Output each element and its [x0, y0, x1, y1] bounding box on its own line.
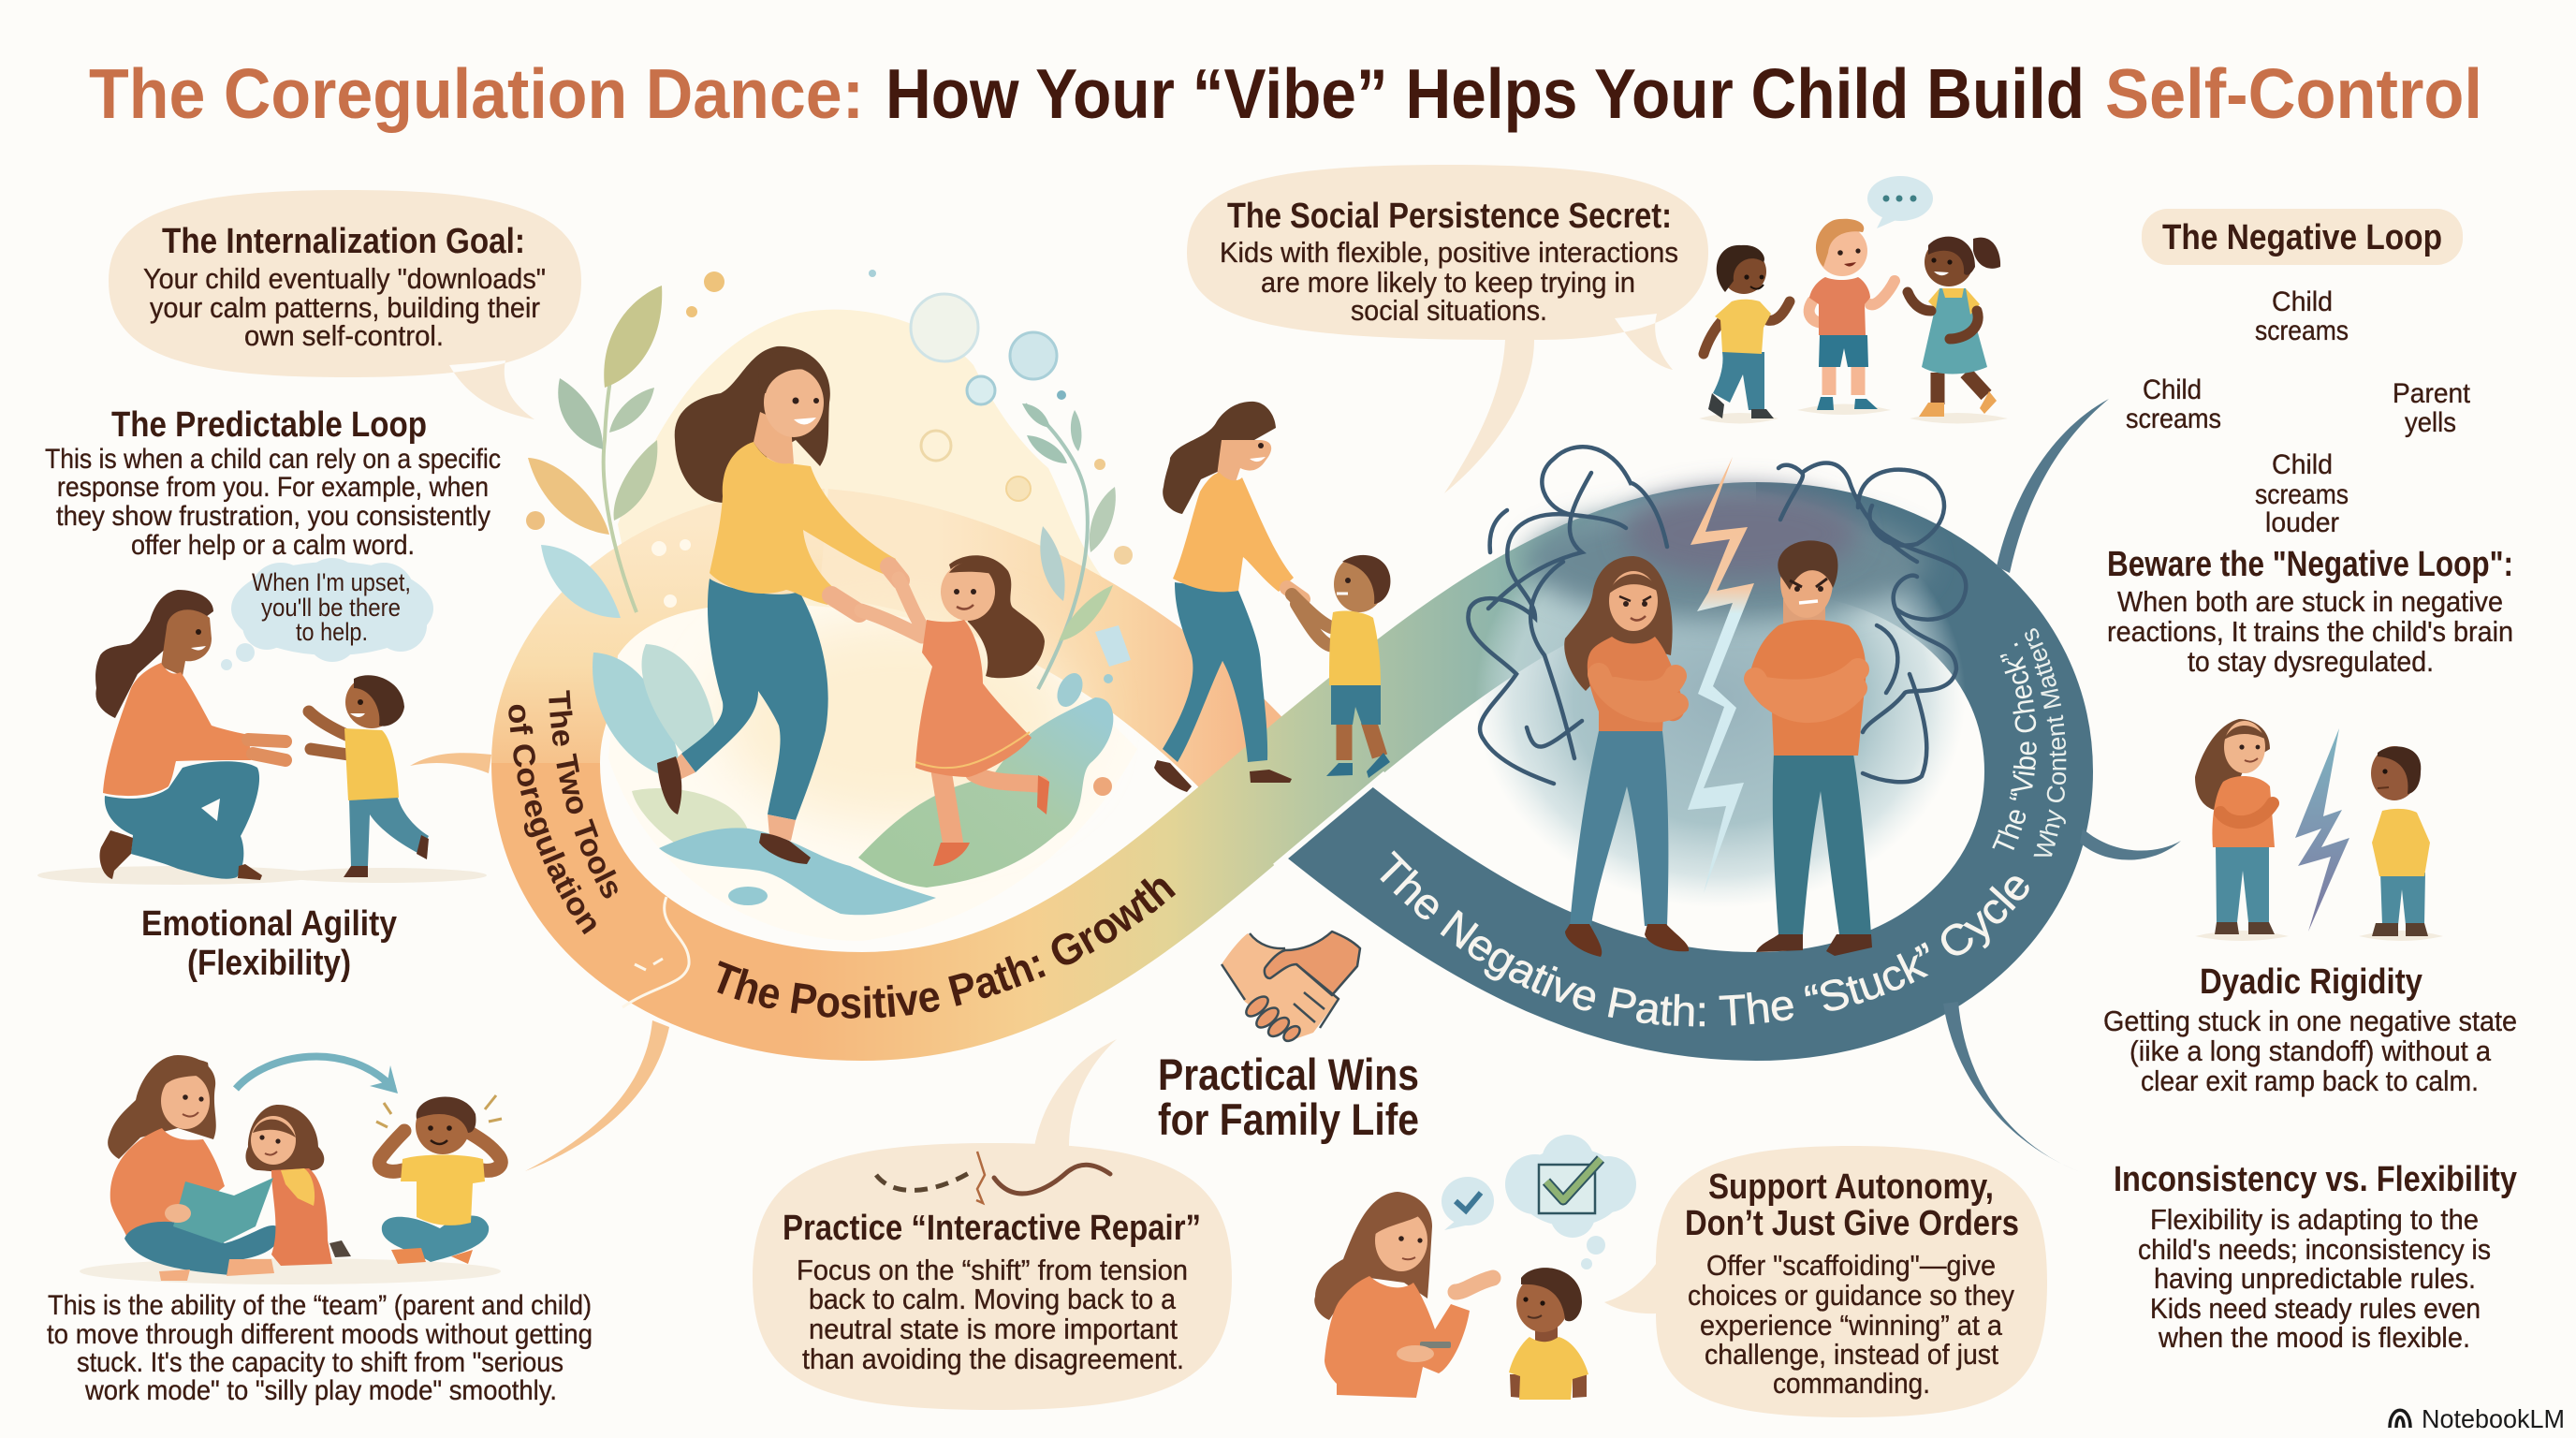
figure: walking mother [1154, 402, 1303, 792]
heading: The Social Persistence Secret: [1227, 197, 1672, 236]
right loop haze [1475, 487, 1966, 908]
body text: When both are stuck in negative [2117, 585, 2503, 618]
child ground shadow [281, 868, 487, 883]
body text: Focus on the “shift” from tension [797, 1254, 1188, 1286]
loop step: child screams left: screams [2126, 404, 2221, 434]
thought cloud with checkbox [1505, 1135, 1636, 1269]
hand outline [1222, 933, 1339, 1028]
sweater [710, 442, 896, 605]
body text [45, 444, 501, 561]
legs [1938, 373, 1986, 404]
ribbon label: positive path: The Positive Path: Growth [717, 878, 1176, 1019]
face [1217, 440, 1271, 482]
head [1817, 226, 1867, 276]
stem and leaves right [1022, 404, 1131, 711]
body text: are more likely to keep trying in [1261, 266, 1635, 299]
figure: dancing mother [657, 346, 900, 864]
girl right [1908, 237, 2000, 417]
figure: three children talking [1699, 176, 2008, 423]
woman face [2224, 721, 2265, 773]
book [173, 1178, 273, 1243]
text: coregulation ability: work mode" to "silly play mode" smoothly. [84, 1375, 557, 1406]
ground shadow [2195, 931, 2443, 941]
title [89, 54, 2482, 133]
hands [831, 566, 900, 613]
hair [1564, 556, 1673, 691]
body text [2138, 1203, 2491, 1354]
heading: The Internalization Goal: [162, 222, 525, 261]
label: emotional agility: (Flexibility) [187, 944, 351, 983]
girl shirt [281, 1168, 315, 1206]
heading: Practice “Interactive Repair” [783, 1209, 1201, 1248]
body text: clear exit ramp back to calm. [2141, 1064, 2479, 1097]
body text: reactions, It trains the child's brain [2107, 615, 2513, 648]
shirt [1715, 300, 1771, 354]
girl dress [271, 1168, 332, 1266]
left hand [1222, 933, 1339, 1039]
ground shadow [37, 866, 318, 885]
thought cloud: to help. [296, 618, 368, 646]
tangled lines: left [1468, 447, 1667, 784]
neck [1535, 1320, 1558, 1343]
thought cloud: When I'm upset, [252, 568, 411, 596]
body text [2103, 1005, 2517, 1097]
heading: The Predictable Loop [111, 405, 427, 445]
sleeves [1928, 288, 1980, 315]
sweater [1173, 473, 1294, 592]
boy left [1704, 245, 1790, 418]
child arms [309, 712, 348, 755]
jeans [1163, 582, 1267, 762]
icon: handshake [1222, 932, 1360, 1044]
child head [345, 676, 398, 728]
heading: Inconsistency vs. Flexibility [2114, 1160, 2517, 1199]
body text: Offer "scaffoiding"—give [1706, 1249, 1996, 1282]
girl face [251, 1116, 296, 1165]
neck and head [1783, 599, 1825, 629]
loop step: child screams left: Child [2143, 374, 2202, 405]
shoes [1565, 924, 1602, 957]
child shoes [344, 835, 429, 877]
ribbon label: vibe check: Why Content Matters [2025, 628, 2067, 857]
connector tails: positive side [410, 753, 669, 1171]
loop step: child screams louder: louder [2265, 507, 2339, 538]
body text: to stay dysregulated. [2188, 645, 2434, 678]
woman shoes [2215, 922, 2275, 934]
shirt [2372, 809, 2430, 876]
loop step: child screams top: Child [2272, 286, 2333, 317]
heading: Support Autonomy, [1708, 1167, 1994, 1207]
icon: central lightning bolt [1688, 457, 1754, 893]
loop step: parent yells: yells [2405, 407, 2456, 438]
loop step: parent yells: Parent [2393, 378, 2471, 409]
girl hair [245, 1105, 324, 1172]
head [1334, 556, 1384, 612]
raised hand [1456, 1278, 1493, 1292]
parent legs [124, 1222, 280, 1275]
shoes [1919, 391, 1997, 417]
arms [1908, 292, 1978, 339]
panel: dyadic rigidity [2103, 962, 2517, 1097]
body text: they show frustration, you consistently [56, 501, 490, 532]
arms [1510, 1374, 1587, 1398]
boy arms [379, 1131, 501, 1171]
jeans [2380, 873, 2425, 925]
icon: broken line repaired [876, 1152, 1110, 1203]
body text: response from you. For example, when [57, 472, 489, 503]
label: emotional agility [141, 904, 397, 983]
text: coregulation ability: This is the ability of the “team” (parent and child) [48, 1290, 592, 1321]
arms [861, 579, 929, 637]
hair [675, 346, 830, 503]
connector tails: negative side [1943, 399, 2181, 1173]
body text [1220, 236, 1678, 327]
boy feet [391, 1248, 473, 1264]
body text: Getting stuck in one negative state [2103, 1005, 2517, 1037]
face and neck [754, 412, 794, 464]
crossed arms [1599, 674, 1677, 712]
parent hands [248, 740, 285, 760]
sweater [1749, 620, 1866, 756]
tangled lines: right [1778, 463, 1966, 782]
bubbles [911, 294, 1057, 501]
parent sweater [110, 1128, 225, 1236]
legs [1344, 721, 1380, 760]
sweater [1325, 1276, 1470, 1398]
title: Self-Control [2105, 54, 2482, 133]
body text: back to calm. Moving back to a [809, 1283, 1177, 1315]
figure: arguing woman [1564, 556, 1689, 957]
figure: kneeling parent and child [37, 590, 487, 885]
body text: Your child eventually "downloads" [143, 262, 546, 295]
negative ribbon: dark right loop [1320, 536, 2039, 1006]
speech bubble with dots [1867, 176, 1933, 228]
ankles and shoes [657, 754, 811, 864]
thought cloud [221, 558, 433, 670]
figure: parent offering choices to child [1314, 1135, 1636, 1400]
boy centre [1809, 219, 1895, 410]
girl [245, 1105, 351, 1266]
tablet [1420, 1342, 1451, 1348]
text: coregulation ability [47, 1290, 593, 1406]
loop step: child screams louder [2255, 449, 2349, 538]
holding hand [1397, 1345, 1434, 1362]
ribbon swirl marks [622, 897, 689, 1007]
arrow: mood shift [236, 1056, 398, 1093]
loop step: child screams left [2126, 374, 2221, 434]
trousers [1773, 754, 1871, 934]
body text: neutral state is more important [809, 1313, 1178, 1345]
dress [1922, 288, 1987, 374]
child shirt [344, 728, 399, 800]
pale interior wash [721, 618, 1076, 824]
parent [1314, 1192, 1493, 1398]
ground shadow [80, 1258, 501, 1284]
body text: when the mood is flexible. [2158, 1321, 2470, 1354]
parent face [161, 1073, 210, 1129]
shoes [1154, 760, 1292, 792]
body text: Kids with flexible, positive interactions [1220, 236, 1678, 269]
head [1925, 238, 1973, 286]
body text: Flexibility is adapting to the [2150, 1203, 2479, 1236]
body text [143, 262, 546, 352]
text: coregulation ability: stuck. It's the capacity to shift from "serious [77, 1347, 564, 1378]
body text [1688, 1249, 2014, 1400]
ponytail [1973, 238, 2000, 269]
shorts [1331, 685, 1381, 725]
body text: child's needs; inconsistency is [2138, 1233, 2491, 1266]
legs [941, 768, 953, 843]
girl shoe [329, 1240, 351, 1257]
face [1609, 571, 1658, 631]
figure: walking boy [1292, 555, 1390, 778]
panel: internalization goal [109, 190, 581, 419]
speech bubble [1187, 165, 1708, 493]
face [941, 563, 995, 621]
parent hair [95, 590, 213, 718]
legs [1829, 367, 1858, 395]
infinity ribbon [546, 536, 2039, 1006]
shoes [1817, 397, 1878, 410]
hair [949, 555, 1045, 678]
shirt [1329, 611, 1381, 685]
parent shoes [99, 830, 133, 879]
figure: reading parent with shifting child [80, 1055, 502, 1284]
fingers [1243, 993, 1303, 1044]
head [1721, 249, 1766, 294]
figure: dancing girl [861, 555, 1049, 866]
icon: lightning [2295, 728, 2349, 932]
boy [2371, 746, 2430, 936]
left loop interior light [608, 604, 1137, 941]
body text: commanding. [1773, 1367, 1930, 1400]
speech bubble [1604, 1146, 2047, 1417]
shirt [1809, 277, 1870, 335]
loop step: child screams louder: screams [2255, 479, 2349, 510]
panel: support autonomy [1604, 1146, 2047, 1417]
parent hair [108, 1055, 216, 1159]
boy head [416, 1098, 470, 1154]
shorts [1819, 335, 1868, 367]
figure: standoff parent and child [2195, 719, 2443, 941]
head [2371, 746, 2418, 800]
body text [2107, 585, 2513, 678]
heading: Don’t Just Give Orders [1685, 1204, 2019, 1243]
body text: This is when a child can rely on a specific [45, 444, 501, 475]
heading pill: The Negative Loop [2162, 218, 2442, 257]
dots [526, 270, 1133, 796]
panel: interactive repair [753, 1039, 1232, 1410]
heading: practical wins: Practical Wins [1158, 1049, 1419, 1099]
text: coregulation ability: to move through different moods without getting [47, 1319, 593, 1350]
arm and hands [1287, 588, 1303, 599]
heading: Dyadic Rigidity [2200, 962, 2422, 1002]
parent feet [159, 1259, 274, 1281]
boy legs [382, 1215, 489, 1262]
excitement marks [376, 1095, 502, 1127]
child jeans [349, 798, 429, 866]
body text: challenge, instead of just [1705, 1338, 1998, 1371]
panel: beware the negative loop [2107, 545, 2513, 678]
speech bubble [109, 190, 581, 419]
body text: your calm patterns, building their [150, 291, 540, 324]
stem left [604, 309, 637, 612]
shirt [1509, 1337, 1588, 1400]
jeans [1713, 352, 1764, 410]
label: emotional agility: Emotional Agility [141, 904, 397, 944]
woman jeans [2216, 844, 2269, 922]
jeans [681, 579, 828, 820]
jeans [1570, 731, 1668, 926]
loop step: child screams top [2255, 286, 2349, 346]
body text: experience “winning” at a [1700, 1309, 2003, 1342]
title: The Coregulation Dance: [89, 54, 864, 133]
botanical decoration [526, 270, 1133, 915]
child [1509, 1268, 1588, 1400]
arms [1704, 301, 1790, 354]
hair [1314, 1192, 1432, 1320]
thought cloud: you'll be there [261, 594, 401, 622]
small bubble with check [1442, 1177, 1494, 1230]
boy shirt [401, 1155, 485, 1225]
parent sweater [103, 663, 251, 796]
sweater [1588, 637, 1685, 731]
panel: inconsistency vs flexibility [2114, 1160, 2517, 1354]
body text: having unpredictable rules. [2154, 1262, 2476, 1295]
ground plants [593, 644, 1113, 915]
heading: practical wins: for Family Life [1158, 1094, 1419, 1144]
ribbon label: the two tools: The Two Tools [549, 690, 618, 899]
title: How Your “Vibe” Helps Your Child Build [886, 54, 2085, 133]
shoes [1756, 934, 1803, 952]
dress [915, 620, 1032, 777]
ribbon label: the two tools: of Coregulation [508, 704, 596, 934]
ribbon: upper arm to crossing [824, 543, 1259, 772]
woman sweater [2212, 776, 2275, 847]
heading [1685, 1167, 2019, 1243]
ribbon: upper arm left side [546, 543, 824, 763]
shoes [1708, 393, 1774, 418]
background glow behind dancing pair [618, 310, 1105, 712]
speech bubble [753, 1039, 1232, 1410]
body text: offer help or a calm word. [131, 530, 415, 561]
loop step: child screams louder: Child [2272, 449, 2333, 480]
right hand [1265, 932, 1360, 995]
panel: social persistence [1187, 165, 1708, 493]
ribbon label: vibe check [1992, 628, 2067, 857]
heading: practical wins [1158, 1049, 1419, 1144]
parent face [161, 609, 212, 676]
face [1375, 1210, 1427, 1271]
ground shadows [1699, 404, 2008, 423]
shoes [2372, 923, 2428, 936]
body text: choices or guidance so they [1688, 1279, 2014, 1312]
body text: own self-control. [244, 319, 444, 352]
loop step: parent yells [2393, 378, 2471, 438]
ribbon label: negative path: The Negative Path: The “Stuck” Cycle [1380, 850, 2029, 1026]
leaves left [528, 286, 662, 618]
arms [1809, 281, 1895, 323]
panel: predictable loop [45, 405, 501, 670]
hair [1163, 402, 1276, 514]
body text: than avoiding the disagreement. [802, 1343, 1184, 1375]
crossed arms [1755, 669, 1858, 712]
body text: social situations. [1351, 294, 1547, 327]
knee gap [201, 799, 220, 821]
body text: Kids need steady rules even [2150, 1292, 2481, 1325]
panel: the negative loop [2126, 209, 2471, 538]
facial features [792, 397, 819, 425]
body text: (iike a long standoff) without a [2130, 1034, 2492, 1067]
shoes [933, 775, 1049, 866]
body text [797, 1254, 1188, 1375]
positive ribbon: growth path [546, 536, 1756, 1006]
ribbon label: vibe check: The “Vibe Check”. [1992, 642, 2037, 850]
woman arms [2220, 803, 2273, 822]
woman hair [2195, 719, 2270, 810]
logo: NotebookLM: NotebookLM [2422, 1404, 2565, 1433]
parent jeans [105, 761, 259, 879]
heading pill [2142, 209, 2463, 265]
shoes [1326, 753, 1390, 778]
arms [1292, 594, 1334, 646]
hand on book [165, 1204, 191, 1223]
loop step: child screams top: screams [2255, 315, 2349, 346]
head [1516, 1274, 1569, 1332]
figure: arguing man [1749, 540, 1872, 956]
